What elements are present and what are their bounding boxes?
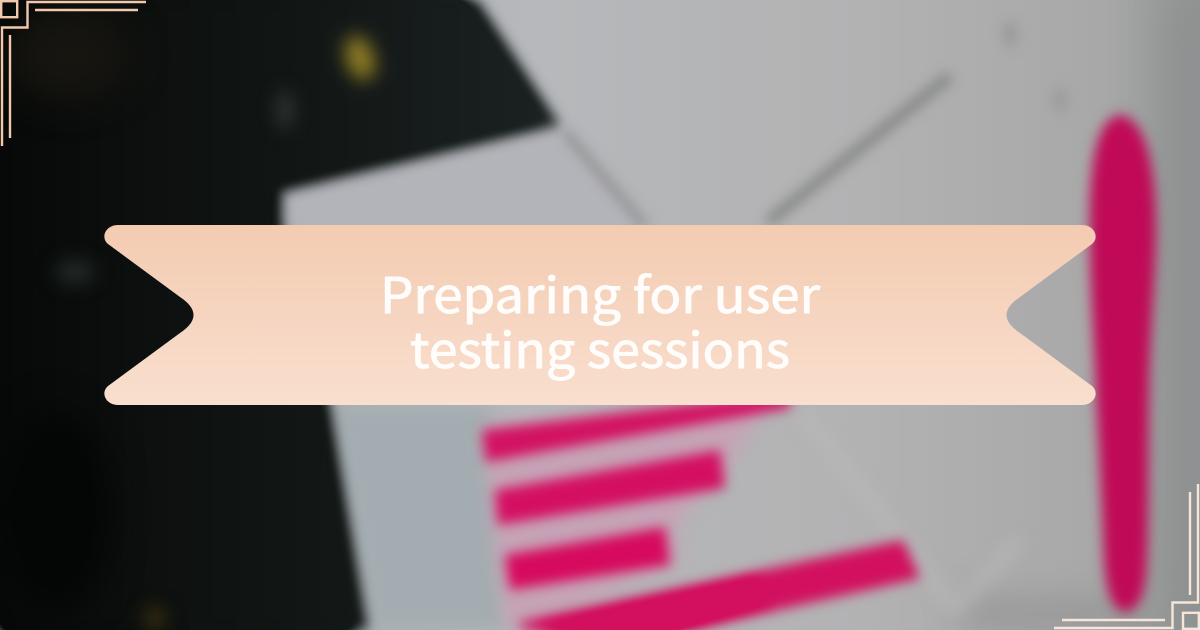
paper sheet highlight: [285, 130, 650, 405]
corner ornament: top left: [1, 1, 146, 146]
pink bar 4: [520, 540, 920, 630]
corner ornament: bottom right: [1054, 484, 1199, 629]
grey speck on desk: [278, 90, 292, 130]
pink bar 3: [505, 527, 670, 590]
second grey mark: [1053, 87, 1067, 113]
pink bar 2: [495, 450, 725, 525]
diagonal grey pen line: [768, 76, 950, 222]
green speck on desk: [55, 260, 95, 284]
gold speck at bottom of desk: [145, 606, 165, 630]
pink highlighter pen: [1090, 115, 1156, 612]
dark desk core: [0, 0, 540, 630]
gold speck on desk: [340, 32, 380, 84]
grey marks on paper: [1003, 21, 1017, 47]
title: [380, 257, 821, 383]
title line 1: Preparing for user: [380, 257, 821, 328]
pink bar 1: [482, 392, 790, 462]
ribbon banner: [104, 225, 1096, 405]
paper fold line: [565, 132, 645, 226]
right edge shading: [1172, 0, 1200, 630]
pink bar 4 core: [536, 578, 770, 630]
title line 2: testing sessions: [410, 312, 790, 383]
brown tint top left: [10, 10, 130, 100]
pale fold at bottom: [800, 410, 1020, 610]
lower paper strip: [330, 405, 510, 630]
lower right shading: [960, 600, 1160, 630]
dark desk area: [0, 0, 560, 630]
pale pink halo behind bars: [482, 400, 770, 630]
black lower left: [0, 410, 110, 610]
